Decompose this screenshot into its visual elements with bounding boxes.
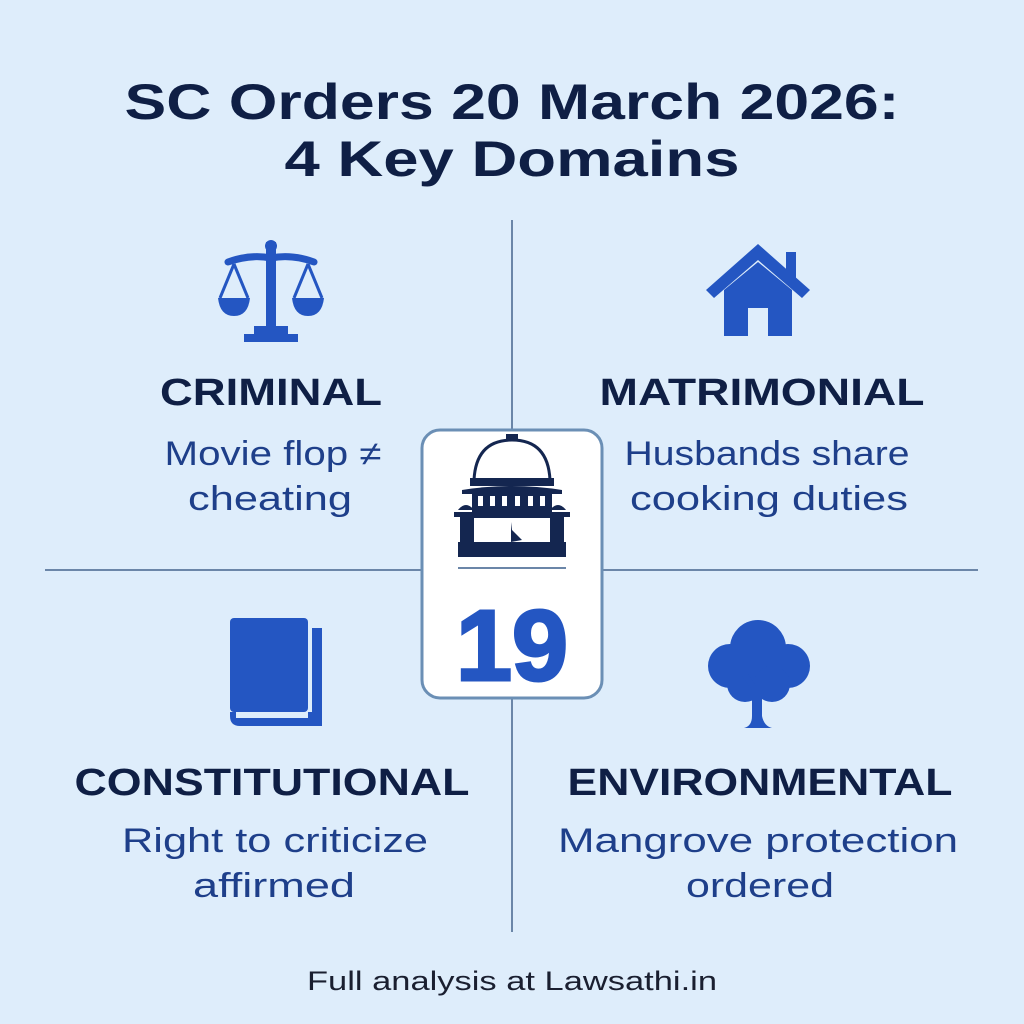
center card bbox=[422, 430, 602, 702]
text: constitutional desc: Right to criticize bbox=[122, 822, 428, 860]
panel: constitutional bbox=[74, 618, 470, 905]
heading: criminal: CRIMINAL bbox=[160, 372, 382, 414]
text: criminal desc: Movie flop ≠ bbox=[164, 435, 382, 473]
heading: constitutional: CONSTITUTIONAL bbox=[74, 762, 470, 804]
panel: constitutional: affirmed bbox=[193, 867, 355, 905]
panel: environmental bbox=[558, 620, 958, 905]
panel: matrimonial bbox=[600, 244, 924, 518]
number: 19: 19 bbox=[456, 590, 568, 702]
icon: scales bbox=[218, 240, 324, 342]
title: 4 Key Domains bbox=[284, 131, 740, 187]
text: matrimonial desc: Husbands share bbox=[624, 435, 910, 473]
icon: book bbox=[230, 618, 322, 726]
text: environmental desc: Mangrove protection bbox=[558, 822, 958, 860]
panel: criminal bbox=[160, 240, 382, 518]
title: SC Orders 20 March 2026: bbox=[124, 74, 900, 130]
icon: supreme court building bbox=[454, 434, 570, 557]
icon: house bbox=[706, 244, 810, 336]
panel: matrimonial: cooking duties bbox=[630, 480, 908, 518]
heading: environmental: ENVIRONMENTAL bbox=[568, 762, 952, 804]
heading: matrimonial: MATRIMONIAL bbox=[600, 372, 924, 414]
icon: tree bbox=[708, 620, 810, 728]
panel: environmental: ordered bbox=[686, 867, 834, 905]
title bbox=[124, 74, 900, 187]
panel: criminal: cheating bbox=[188, 480, 352, 518]
footer: Full analysis at Lawsathi.in bbox=[307, 966, 717, 996]
